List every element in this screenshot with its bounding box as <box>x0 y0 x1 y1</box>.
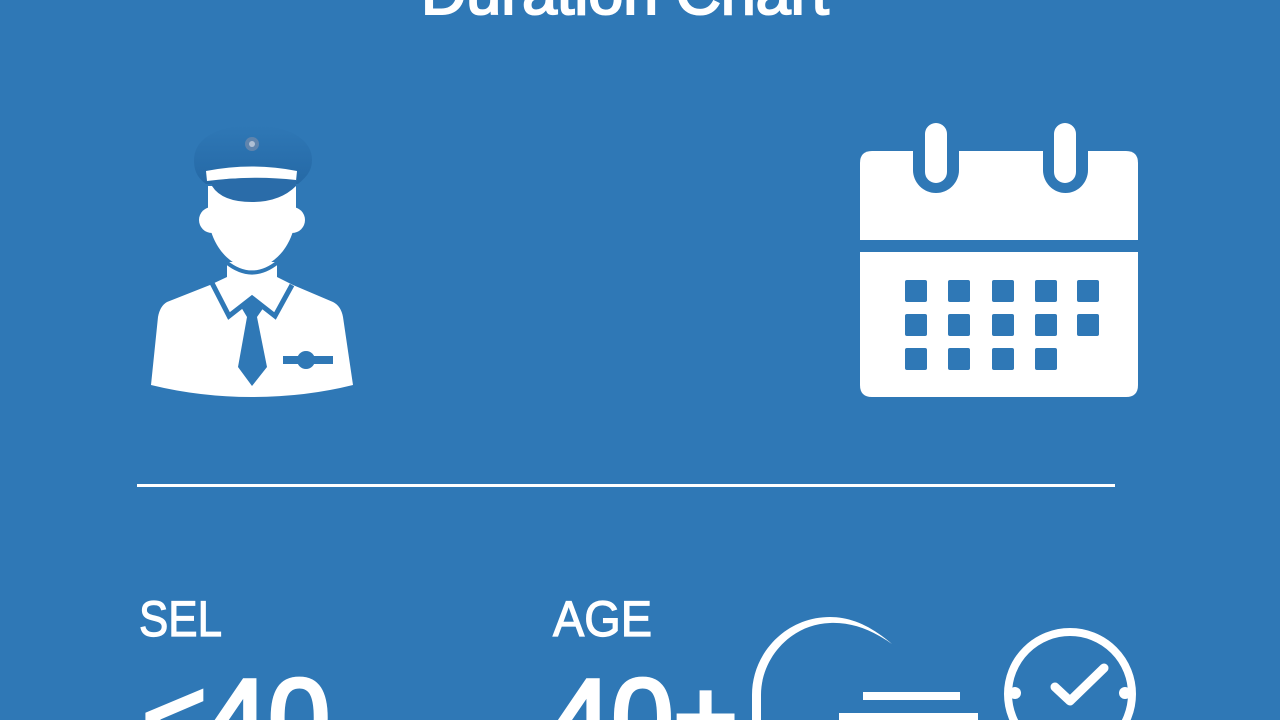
pilot face <box>208 186 296 268</box>
pilot ears <box>199 207 305 233</box>
pilot badge <box>283 351 333 369</box>
pilot neck shadow <box>226 262 278 272</box>
label: SEL: SEL <box>139 591 222 647</box>
pilot hat band <box>206 166 297 181</box>
calendar day grid <box>905 280 1099 370</box>
check mark <box>1055 668 1104 701</box>
document lines <box>839 692 978 720</box>
pilot hat crown <box>194 125 312 184</box>
icon: partial circle with document <box>752 617 978 720</box>
pilot tie <box>238 296 267 386</box>
pilot collar <box>212 283 292 316</box>
calendar ring right <box>1043 123 1088 193</box>
label: AGE: AGE <box>553 591 652 647</box>
pilot body <box>151 262 353 397</box>
calendar ring left <box>913 123 959 193</box>
pilot hat brim <box>212 178 296 202</box>
icon: pilot <box>151 125 353 397</box>
calendar body <box>860 252 1138 397</box>
calendar header <box>860 151 1138 240</box>
pilot hat emblem <box>245 137 259 151</box>
clock ticks <box>1009 687 1131 699</box>
clock ring <box>1008 632 1132 720</box>
icon: calendar <box>860 123 1138 397</box>
icon: clock with check <box>1008 632 1132 720</box>
tapered arc <box>752 617 892 720</box>
